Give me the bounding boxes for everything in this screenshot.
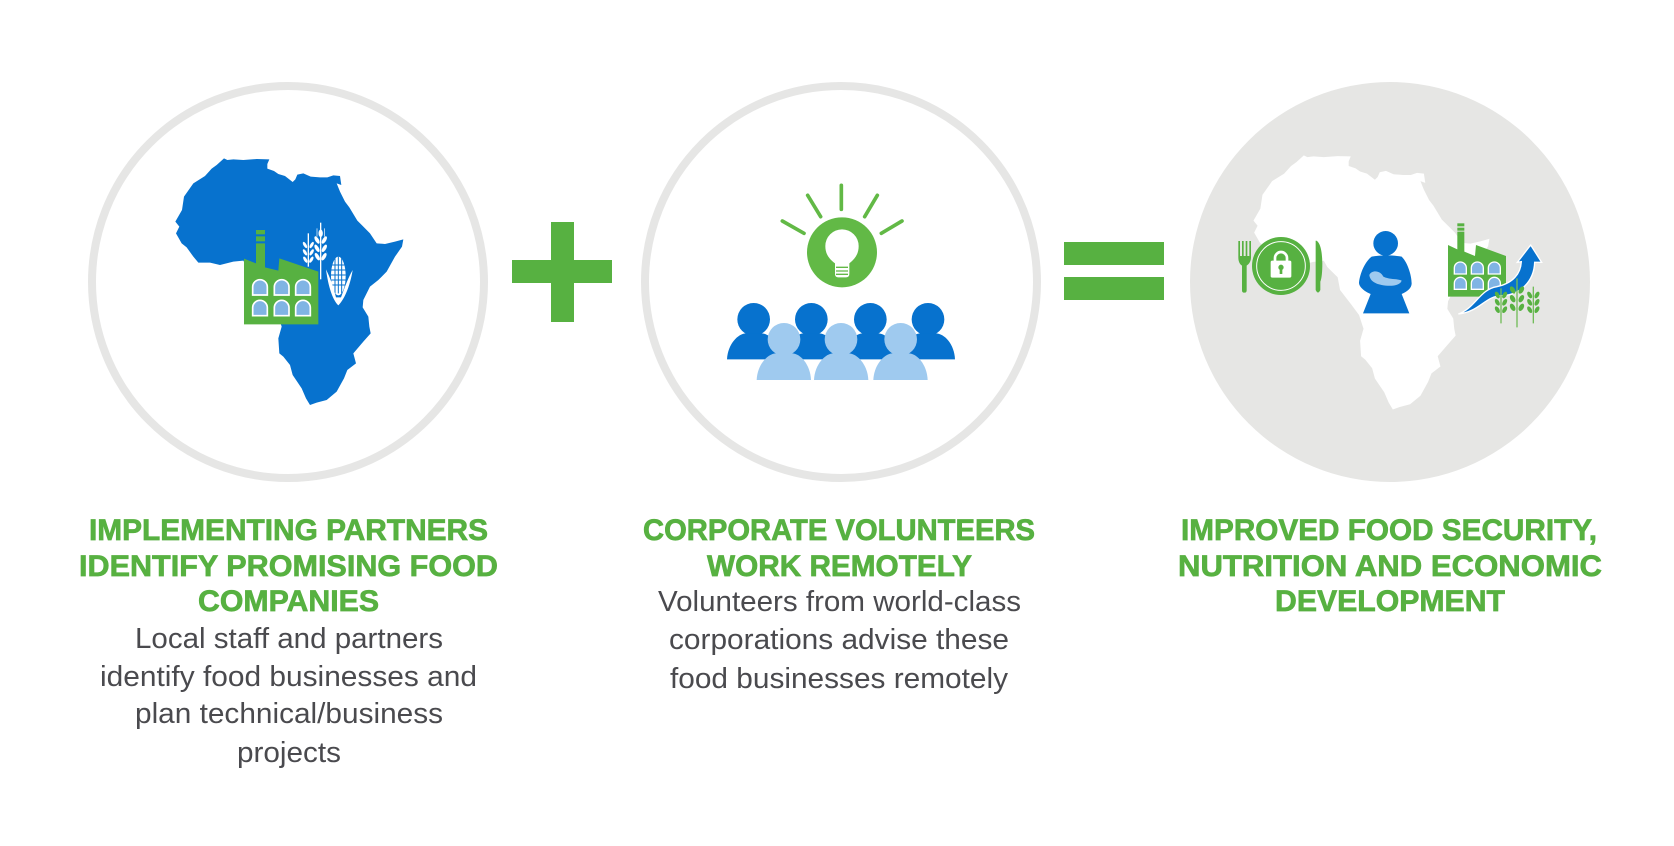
- text block: implementing partners: [79, 514, 498, 769]
- circle outline 2: [645, 86, 1037, 478]
- icon group: Africa with factory and crops: [175, 158, 403, 405]
- panel: outcomes illustration: [1190, 82, 1590, 482]
- heading: implementing partners: IMPLEMENTING PARTNERS: [89, 514, 488, 547]
- icon: factory with growth arrow and crops: [1448, 223, 1542, 327]
- icon: plate, fork, knife and lock: [1238, 237, 1322, 295]
- body: corporate volunteers description: [658, 586, 1021, 695]
- icon: wheat stalks: [302, 223, 328, 279]
- heading: improved food security: [1178, 514, 1602, 618]
- heading: corporate volunteers: [643, 514, 1035, 583]
- plus sign: [512, 222, 612, 322]
- body: corporate volunteers description: Volunteers from world-class: [658, 586, 1021, 618]
- Africa map, blue: [175, 158, 403, 405]
- body: implementing partners description: identify food businesses and: [100, 661, 477, 693]
- icon group: light bulb over team: [727, 185, 955, 380]
- icon: light blue team members: [757, 323, 928, 380]
- icon: factory: [244, 230, 318, 324]
- body: implementing partners description: projects: [237, 737, 341, 769]
- heading: corporate volunteers: WORK REMOTELY: [707, 550, 972, 583]
- text block: corporate volunteers: [643, 514, 1035, 695]
- circle outline 1: [92, 86, 484, 478]
- panel: implementing partners illustration: [92, 86, 484, 478]
- heading: improved food security: NUTRITION AND ECONOMIC: [1178, 550, 1602, 583]
- icon: light bulb with rays: [782, 185, 902, 287]
- body: implementing partners description: Local staff and partners: [135, 623, 443, 655]
- icon group: outcomes: [1238, 223, 1542, 327]
- heading: implementing partners: COMPANIES: [198, 585, 379, 618]
- equals sign: [1064, 242, 1164, 300]
- panel: corporate volunteers illustration: [645, 86, 1037, 478]
- heading: improved food security: IMPROVED FOOD SECURITY,: [1181, 514, 1597, 547]
- heading: implementing partners: IDENTIFY PROMISING FOOD: [79, 550, 498, 583]
- icon: corn cob: [326, 257, 353, 305]
- body: corporate volunteers description: food businesses remotely: [670, 663, 1009, 695]
- icon: dark blue team members: [727, 303, 955, 359]
- heading: corporate volunteers: CORPORATE VOLUNTEERS: [643, 514, 1035, 547]
- body: corporate volunteers description: corporations advise these: [669, 624, 1009, 656]
- filled grey circle: [1190, 82, 1590, 482]
- heading: improved food security: DEVELOPMENT: [1275, 585, 1505, 618]
- body: implementing partners description: plan technical/business: [135, 698, 443, 730]
- icon: mother holding baby: [1359, 231, 1412, 313]
- heading: implementing partners: [79, 514, 498, 618]
- body: implementing partners description: [100, 623, 477, 769]
- white Africa map: [1253, 155, 1489, 409]
